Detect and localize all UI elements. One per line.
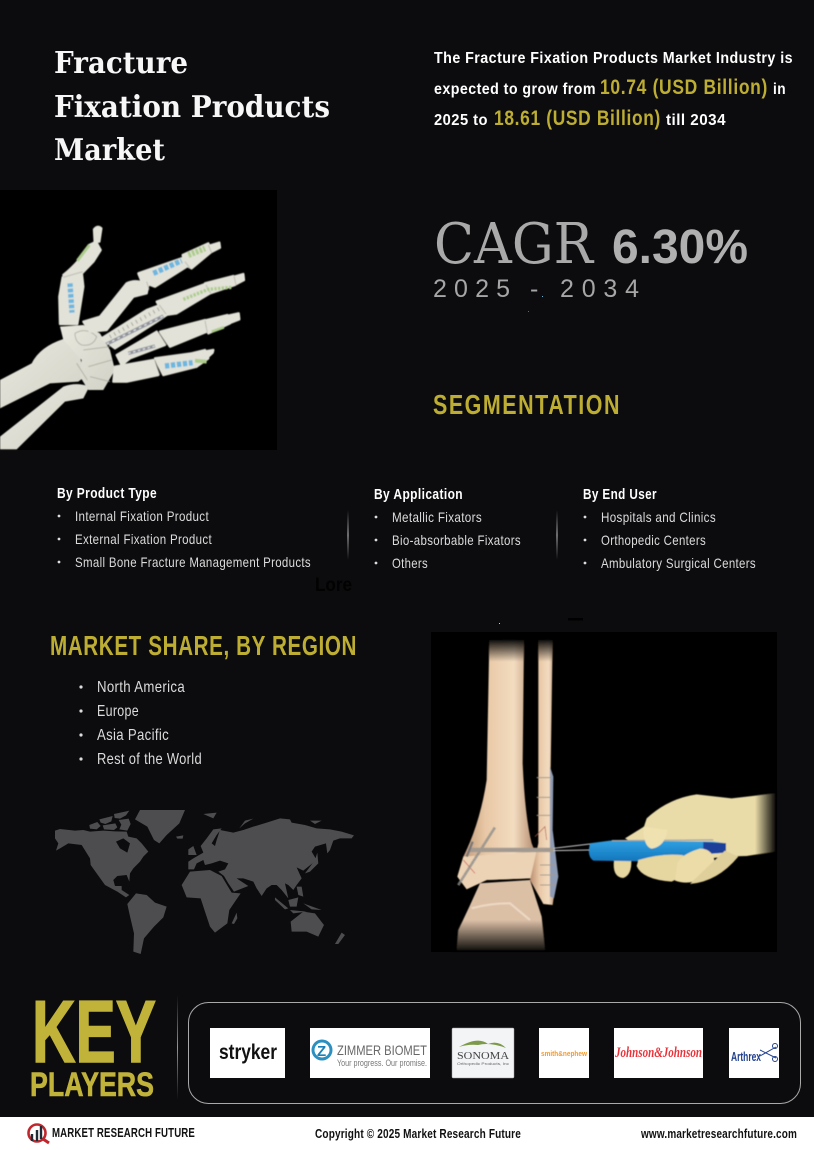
plates <box>70 245 232 366</box>
heading: market share by region: MARKET SHARE, BY REGION <box>50 630 357 661</box>
joint shading <box>63 245 236 375</box>
segment list: by application: By Application <box>374 486 463 503</box>
world map <box>55 810 354 954</box>
heading: segmentation: SEGMENTATION <box>433 389 621 420</box>
segment list: by application <box>374 486 521 571</box>
segment list: by end user: Orthopedic Centers <box>601 532 706 548</box>
segment list: by end user: Ambulatory Surgical Centers <box>601 555 756 571</box>
logo: johnson and johnson <box>614 1028 703 1078</box>
CAGR: 6.30% <box>612 221 748 274</box>
segment list: by product type <box>57 485 311 570</box>
CAGR: 2034 <box>560 275 639 303</box>
logo: sonoma: SONOMA <box>457 1050 509 1062</box>
CAGR: CAGR <box>434 212 595 277</box>
heading: key players <box>30 982 156 1104</box>
segment list: by application: Others <box>392 555 428 571</box>
CAGR <box>433 212 748 312</box>
faint stray text: Lore <box>315 575 352 596</box>
finger bones <box>59 227 244 382</box>
image: ankle fracture fixation <box>431 632 777 952</box>
logo: stryker <box>210 1028 285 1078</box>
segment list: by application: Metallic Fixators <box>392 509 482 525</box>
segment list: by end user: Hospitals and Clinics <box>601 509 716 525</box>
forearm and wrist bones <box>0 325 115 449</box>
logo: zimmer biomet: Z <box>317 1043 326 1060</box>
market growth statement: till 2034 <box>666 112 726 129</box>
logo: stryker: stryker <box>219 1041 277 1064</box>
segment list: by product type: Small Bone Fracture Management Products <box>75 554 311 570</box>
logo: sonoma <box>452 1028 514 1078</box>
logo: smith and nephew <box>539 1028 589 1078</box>
logo: johnson and johnson: Johnson&Johnson <box>614 1045 702 1061</box>
key players panel <box>188 1002 800 1104</box>
image: hand skeleton with fixation plates <box>0 190 277 450</box>
region list: Europe <box>97 703 139 720</box>
logo: arthrex <box>729 1028 779 1078</box>
logo: zimmer biomet <box>310 1028 430 1078</box>
title: Market <box>54 133 165 168</box>
logo: arthrex: Arthrex <box>731 1049 761 1064</box>
title: Fracture <box>54 46 188 81</box>
market growth statement: 18.61 (USD Billion) <box>494 107 661 130</box>
logo: sonoma: Orthopedic Products, Inc <box>457 1061 509 1066</box>
market growth statement: in <box>773 81 786 98</box>
market growth statement: expected to grow from <box>434 81 596 98</box>
market growth statement: 10.74 (USD Billion) <box>600 76 768 99</box>
segment list: by product type: By Product Type <box>57 485 157 502</box>
logo: zimmer biomet: ZIMMER BIOMET <box>337 1042 427 1058</box>
heading: key players: KEY <box>32 982 156 1081</box>
logo: smith and nephew: smith&nephew <box>541 1051 587 1058</box>
footer: MARKET RESEARCH FUTURE <box>52 1125 195 1140</box>
footer: Copyright © 2025 Market Research Future <box>315 1126 521 1141</box>
footer <box>0 1117 814 1150</box>
title: Fixation Products <box>54 90 330 125</box>
logo: zimmer biomet: Your progress. Our promise. <box>337 1058 427 1068</box>
region list: Asia Pacific <box>97 727 169 744</box>
CAGR: 2025 <box>433 275 510 303</box>
region list: Rest of the World <box>97 751 202 768</box>
segment list: by product type: Internal Fixation Product <box>75 508 209 524</box>
heading: key players: PLAYERS <box>30 1066 154 1104</box>
segment list: by product type: External Fixation Product <box>75 531 212 547</box>
market growth statement: 2025 to <box>434 112 488 129</box>
segment list: by end user <box>583 486 756 571</box>
CAGR: - <box>530 275 538 303</box>
title <box>54 46 330 168</box>
segment list: by application: Bio-absorbable Fixators <box>392 532 521 548</box>
region list <box>79 679 202 768</box>
region list: North America <box>97 679 185 696</box>
footer logo icon <box>28 1124 49 1143</box>
market growth statement <box>434 50 793 130</box>
segment list: by end user: By End User <box>583 486 657 503</box>
